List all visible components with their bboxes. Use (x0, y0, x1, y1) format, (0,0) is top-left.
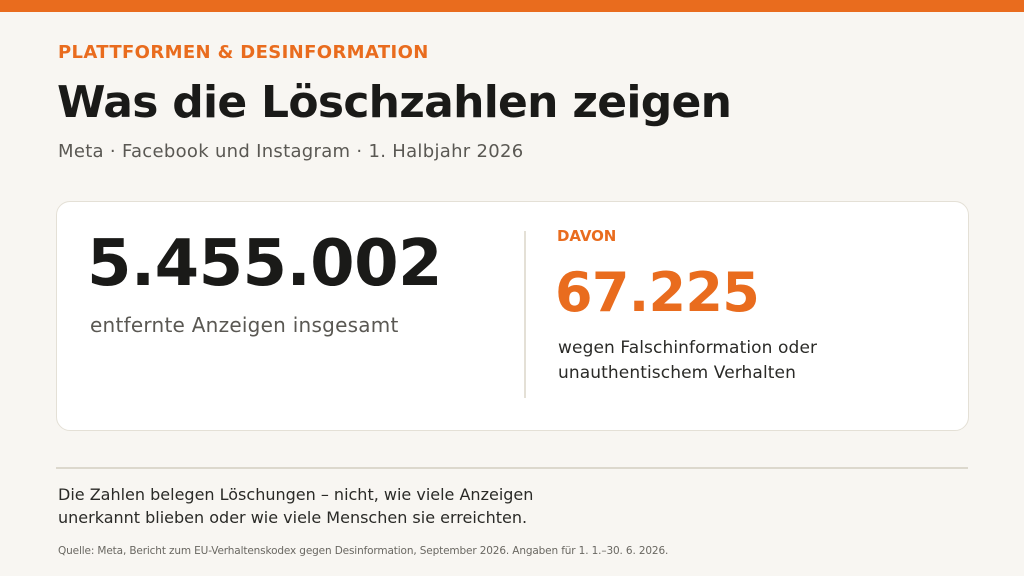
source: Quelle: Meta, Bericht zum EU-Verhaltenskodex gegen Desinformation, September 2026. Angaben für 1. 1.–30. 6. 2026. (58, 545, 668, 557)
misinformation label: wegen Falschinformation oder (558, 338, 817, 358)
davon label: DAVON (557, 227, 616, 245)
misinformation label (558, 338, 817, 383)
footnote statement (58, 485, 533, 527)
footer rule (56, 467, 968, 469)
top accent bar (0, 0, 1024, 12)
panel: statistics card (56, 201, 969, 431)
divider (524, 231, 526, 398)
footnote statement: unerkannt blieben oder wie viele Menschen sie erreichten. (58, 508, 527, 527)
total number: 5.455.002 (87, 227, 442, 301)
misinformation label: unauthentischem Verhalten (558, 363, 796, 383)
misinformation number: 67.225 (555, 261, 759, 324)
subtitle: Meta · Facebook und Instagram · 1. Halbjahr 2026 (58, 141, 524, 162)
total label: entfernte Anzeigen insgesamt (90, 313, 399, 337)
kicker: PLATTFORMEN & DESINFORMATION (58, 42, 429, 63)
title: Was die Löschzahlen zeigen (57, 77, 731, 128)
footnote statement: Die Zahlen belegen Löschungen – nicht, wie viele Anzeigen (58, 485, 533, 504)
